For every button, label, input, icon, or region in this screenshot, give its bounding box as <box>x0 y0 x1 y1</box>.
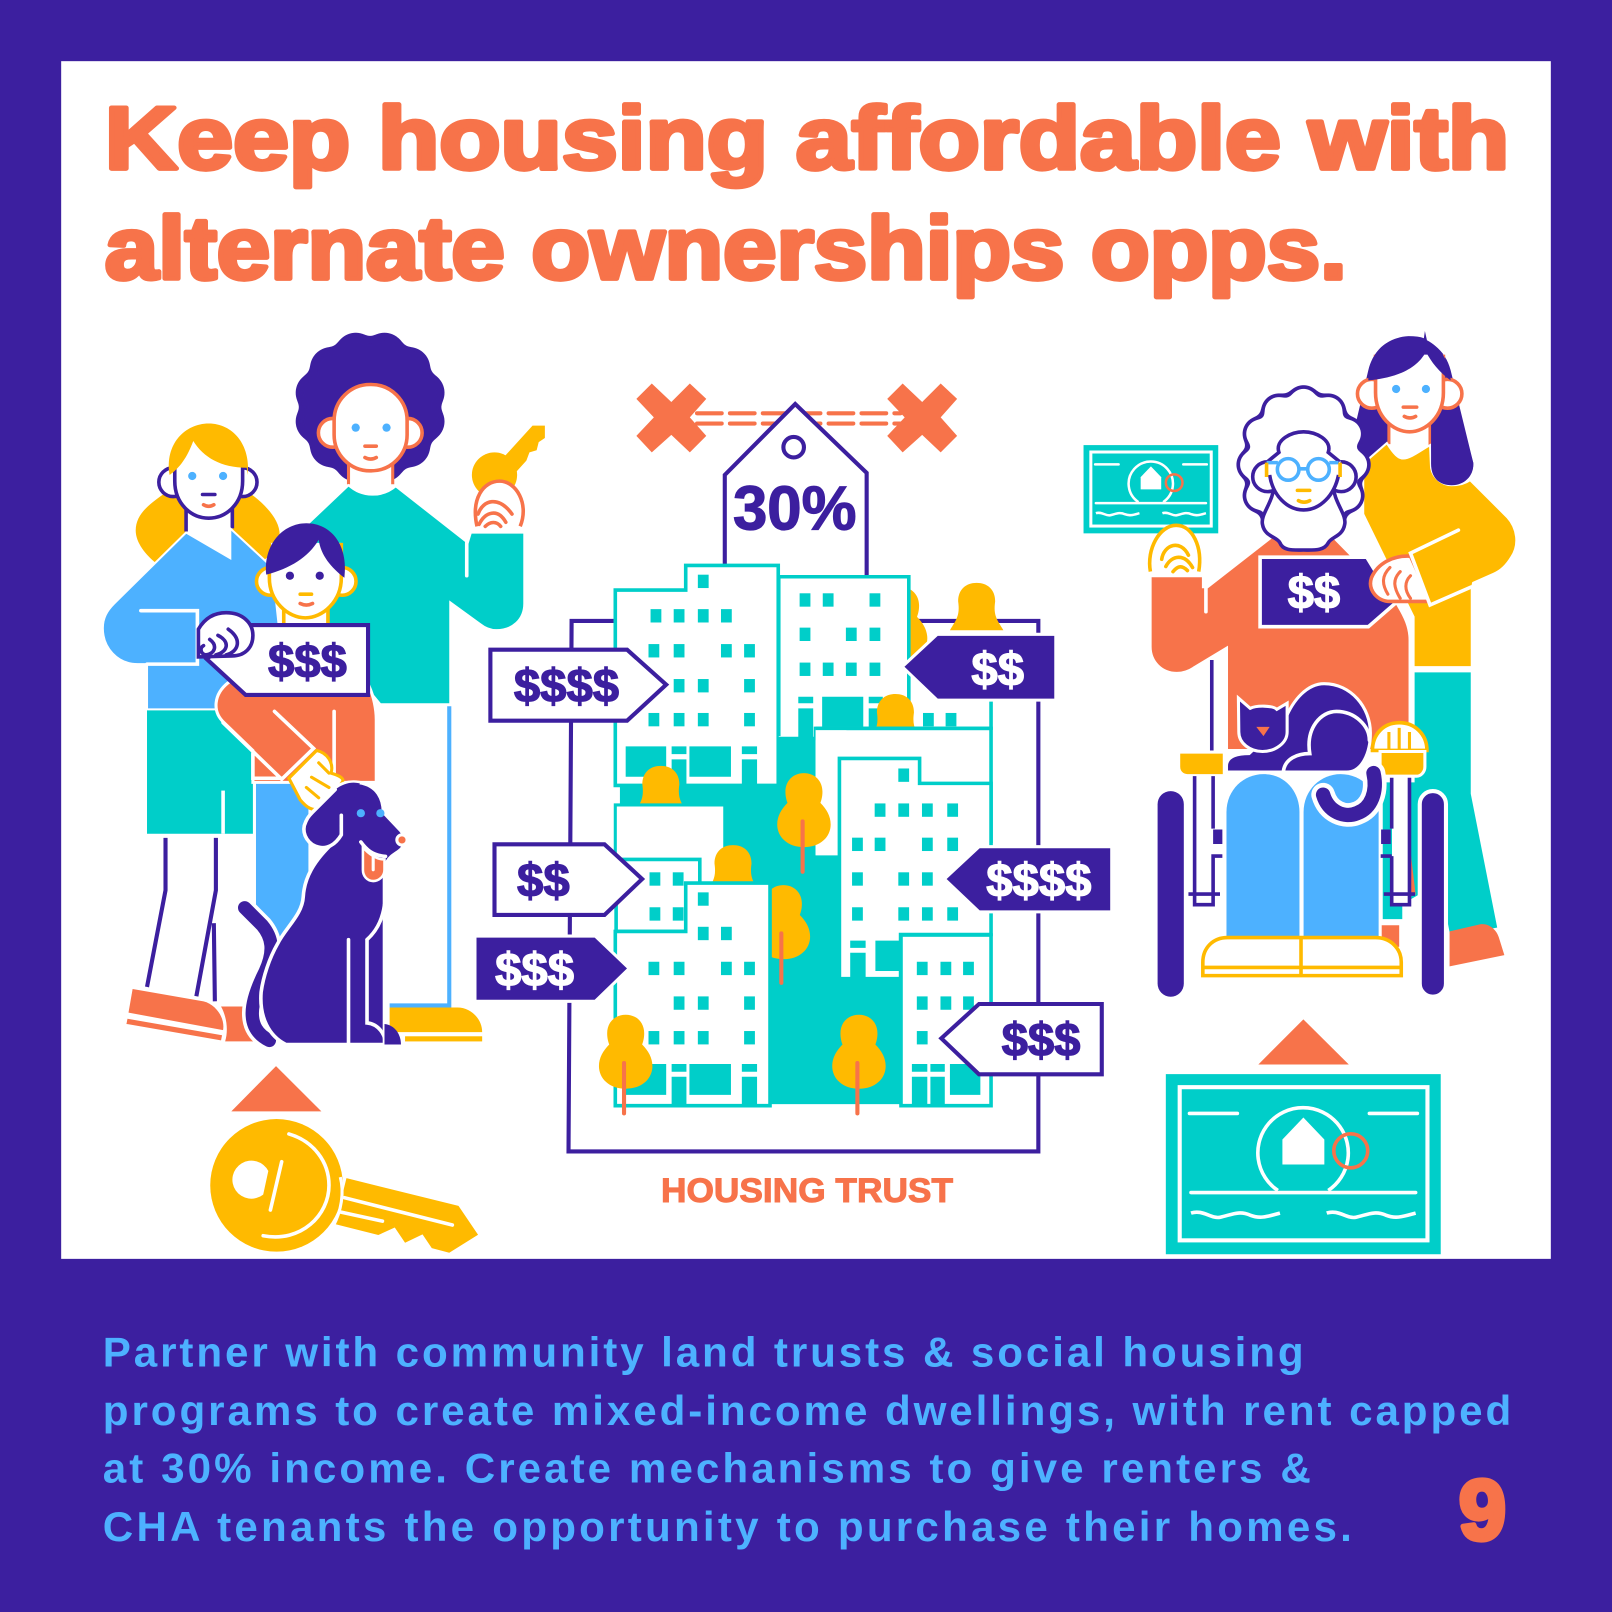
boy head <box>257 543 356 618</box>
afro hair <box>295 332 445 482</box>
frame blocks <box>1213 829 1391 844</box>
cat nose <box>1256 727 1270 736</box>
blue legs <box>1226 774 1379 937</box>
dog ear <box>304 783 360 848</box>
dog leg lines <box>349 842 386 1045</box>
grandmother ears <box>1253 462 1356 492</box>
grandmother bun <box>1268 432 1340 462</box>
cat haunch lines <box>1283 711 1369 771</box>
orange shoe carer <box>1450 924 1504 966</box>
trees front <box>599 773 886 1113</box>
glasses tips <box>1267 463 1340 477</box>
orange sweater <box>1150 537 1410 750</box>
teal sweater <box>308 485 524 704</box>
blue hand on tag <box>198 613 253 657</box>
armrest right <box>1380 752 1425 776</box>
price tag: $$ left <box>494 844 642 915</box>
blonde hair <box>169 424 248 475</box>
body text: programs to create mixed-income dwellings, with rent capped <box>103 1387 1511 1434</box>
sweater lines <box>1206 586 1352 720</box>
afro woman neck <box>349 463 393 498</box>
dog ear outline <box>304 790 341 848</box>
frame interior right <box>1392 776 1409 905</box>
lap hand fingers <box>1389 728 1409 749</box>
footrest <box>1203 938 1401 976</box>
yellow hand on dog <box>289 750 343 810</box>
teal trousers <box>1382 671 1498 938</box>
blonde woman neck <box>186 509 232 560</box>
blonde woman face <box>159 452 257 518</box>
cat body <box>1226 684 1370 772</box>
building G <box>615 805 725 884</box>
dog eyes and nose <box>357 809 407 845</box>
price tag: $$$ left <box>475 936 629 1001</box>
orange-trunk tree behind I <box>757 885 810 959</box>
building D side <box>816 728 846 855</box>
wheel right <box>1420 791 1446 997</box>
glasses <box>1267 459 1339 480</box>
dog tongue <box>363 847 384 881</box>
carer hair top <box>1368 331 1451 380</box>
body text <box>103 1328 1511 1550</box>
carer features <box>1392 385 1430 418</box>
boy sleeve lines <box>223 711 334 781</box>
blonde woman legs <box>147 838 216 1001</box>
price tag: $$ right <box>902 634 1056 700</box>
price tag: $$$$ left: $$$$ <box>514 660 619 713</box>
icon: big banknote <box>1166 1074 1441 1254</box>
price tag: $$$ right <box>941 1004 1102 1074</box>
hand fingers <box>478 502 512 526</box>
teal shorts <box>147 710 253 834</box>
orange shoes <box>126 989 262 1041</box>
boy hair <box>266 523 345 578</box>
x marker left <box>636 383 706 452</box>
carer cuff line <box>1410 530 1471 605</box>
title: alternate ownerships opps. <box>105 199 1347 298</box>
wheelchair <box>1158 660 1446 997</box>
arrow up: note <box>1258 1019 1349 1064</box>
grandmother face outline <box>1270 475 1339 510</box>
family group: left <box>103 332 545 1045</box>
body text: at 30% income. Create mechanisms to give renters & <box>103 1444 1311 1491</box>
x marker right <box>887 383 957 452</box>
afro woman features <box>352 424 391 459</box>
body text: CHA tenants the opportunity to purchase their homes. <box>103 1503 1352 1550</box>
building H <box>616 859 700 931</box>
price tag: $$ left: $$ <box>517 854 570 907</box>
building D outline <box>816 728 991 843</box>
building E <box>816 728 991 980</box>
price tag: family <box>207 625 368 695</box>
wheel left <box>1158 791 1184 997</box>
afro woman pants line <box>390 706 449 1005</box>
blue sweater <box>103 528 288 709</box>
yellow sweater <box>1363 443 1516 667</box>
arrow up: key <box>231 1066 321 1111</box>
cat <box>1226 684 1375 815</box>
grandmother hair lower and beard <box>1262 483 1345 550</box>
tree behind building <box>874 587 927 661</box>
right group: grandmother, carer <box>1150 331 1516 997</box>
icon: small banknote <box>1084 445 1218 533</box>
price tag: $$$$ right <box>944 847 1112 912</box>
price tag: grandmother <box>1260 557 1395 627</box>
icon: big key <box>210 1119 478 1253</box>
grandmother raised hand <box>1150 525 1200 572</box>
boy features <box>286 572 324 605</box>
shrub left <box>634 766 688 813</box>
shrub near H <box>706 845 760 892</box>
grandmother hair inner white <box>1239 388 1368 541</box>
boy orange sweater <box>216 668 376 782</box>
building F <box>901 935 991 1106</box>
boy neck <box>284 607 328 627</box>
armrest left <box>1180 754 1223 774</box>
30% price tag <box>725 404 867 578</box>
carer finger lines <box>1383 567 1410 598</box>
frame lines <box>1188 660 1415 905</box>
blue sleeve line <box>141 611 197 664</box>
carer hair over shoulder <box>1431 380 1473 485</box>
housing trust label: HOUSING TRUST <box>661 1172 953 1210</box>
other shoe <box>1382 925 1399 947</box>
grandmother face <box>1269 448 1341 510</box>
dog body <box>261 782 405 1045</box>
sleeve line <box>465 543 468 576</box>
building A <box>615 565 778 785</box>
hand finger lines <box>306 763 329 798</box>
price tag: $$ right: $$ <box>971 644 1024 697</box>
finger lines <box>201 629 237 655</box>
title: Keep housing affordable with <box>105 89 1509 188</box>
building B <box>779 577 909 737</box>
yellow shrub middle <box>869 694 922 741</box>
teal ground <box>620 736 990 1104</box>
yellow shrub top right <box>950 583 1003 630</box>
carer hand on tag <box>1371 556 1431 601</box>
carer cuff <box>1410 530 1480 605</box>
trust frame <box>569 621 1038 1151</box>
small key held up <box>472 426 545 498</box>
pigtails <box>136 489 280 563</box>
price tag: $$$$ left <box>490 650 666 721</box>
price tag: grandmother: $$ <box>1288 567 1340 620</box>
title <box>105 89 1509 298</box>
raised hand fingers <box>1162 545 1193 572</box>
dashed range arrow <box>697 413 901 424</box>
carer face <box>1357 355 1462 432</box>
grandmother features <box>1297 490 1310 502</box>
cat head <box>1238 698 1287 752</box>
cat tail <box>1323 773 1375 815</box>
price tag: $$$ right: $$$ <box>1002 1014 1080 1067</box>
price tag: $$$$ right: $$$$ <box>986 854 1091 907</box>
building C edge and windows <box>923 701 991 730</box>
afro woman face <box>318 384 422 471</box>
boy blue pants <box>256 778 308 944</box>
price tag: $$$ left: $$$ <box>495 944 574 997</box>
carer hair back <box>1355 337 1473 485</box>
building I <box>615 883 770 1106</box>
blonde features <box>188 472 227 506</box>
yellow shoe <box>390 1008 482 1041</box>
sliver of orange leg <box>1409 843 1416 896</box>
30% price tag: 30% <box>733 474 856 543</box>
grandmother lap hand <box>1372 723 1427 750</box>
carer neck <box>1389 422 1430 461</box>
center: housing trust <box>475 383 1112 1210</box>
white panel <box>61 61 1551 1259</box>
building D <box>816 728 991 855</box>
dog paw <box>384 1024 401 1045</box>
tongue mark <box>372 857 375 870</box>
dog tail <box>245 908 271 1040</box>
grandmother hair outer outline <box>1236 384 1371 545</box>
body text: Partner with community land trusts & social housing <box>103 1328 1304 1375</box>
price tag: family: $$$ <box>268 635 347 688</box>
afro woman hand <box>475 481 523 526</box>
page number: 9 <box>1459 1463 1506 1557</box>
